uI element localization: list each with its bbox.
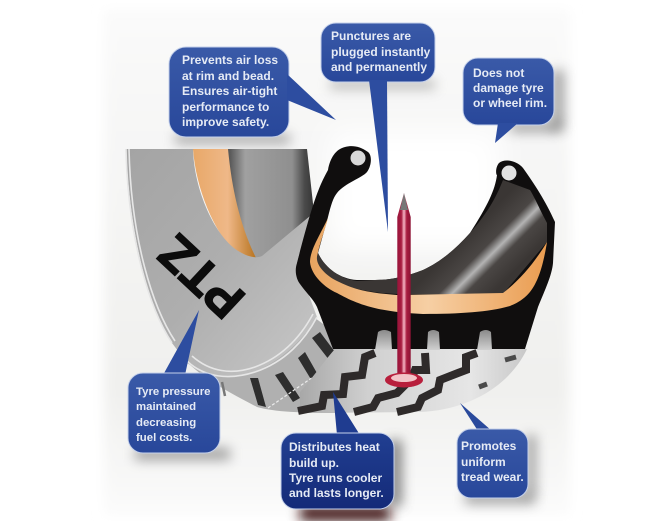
orange band bbox=[310, 218, 547, 314]
callout: prevents air loss: Ensures air-tight bbox=[182, 84, 277, 98]
callout: tyre pressure bbox=[128, 310, 220, 453]
callout: tyre pressure: Tyre pressure bbox=[136, 386, 211, 398]
callout: tyre pressure: fuel costs. bbox=[136, 432, 192, 444]
callout: does not damage: Does not bbox=[473, 66, 524, 80]
callout: tyre pressure: decreasing bbox=[136, 417, 196, 429]
callout: does not damage: or wheel rim. bbox=[473, 96, 547, 110]
tread surface bbox=[298, 349, 527, 413]
sidewall bbox=[126, 149, 317, 377]
right tyre cross-section bbox=[296, 146, 555, 413]
callout: punctures plugged: plugged instantly bbox=[331, 45, 431, 59]
callout: distributes heat: and lasts longer. bbox=[289, 486, 384, 500]
left tyre cross-section bbox=[126, 149, 345, 413]
callout: punctures plugged: Punctures are bbox=[331, 29, 411, 43]
callout: prevents air loss: improve safety. bbox=[182, 115, 269, 129]
callout: uniform tread wear: uniform bbox=[461, 455, 506, 469]
callout: punctures plugged: and permanently bbox=[331, 60, 427, 74]
callout: distributes heat: Tyre runs cooler bbox=[289, 471, 382, 485]
callout: uniform tread wear: Promotes bbox=[461, 439, 517, 453]
callout: uniform tread wear: tread wear. bbox=[461, 470, 524, 484]
rim bead left bbox=[350, 150, 366, 166]
callout: punctures plugged bbox=[321, 23, 435, 232]
callout: prevents air loss bbox=[169, 47, 336, 137]
orange tube layer bbox=[193, 149, 256, 258]
tread pillars bbox=[375, 330, 492, 350]
tyre inner cavity bbox=[193, 149, 317, 300]
callout: does not damage: damage tyre bbox=[473, 81, 544, 95]
tread grooves bbox=[298, 353, 477, 412]
rim bead right bbox=[502, 166, 516, 180]
PTZ logo: PTZ bbox=[148, 224, 255, 329]
callout: prevents air loss: Prevents air loss bbox=[182, 53, 278, 67]
callout: does not damage bbox=[463, 58, 554, 143]
black casing bbox=[296, 146, 555, 349]
tyre tread blocks left bbox=[185, 318, 345, 413]
callout: distributes heat bbox=[281, 392, 394, 509]
callout: distributes heat: Distributes heat bbox=[289, 440, 380, 454]
inner liner bbox=[316, 180, 547, 294]
nail bbox=[385, 193, 423, 388]
callout: prevents air loss: performance to bbox=[182, 100, 269, 114]
callout: distributes heat: build up. bbox=[289, 456, 339, 470]
callout: uniform tread wear bbox=[457, 403, 528, 498]
callout: tyre pressure: maintained bbox=[136, 401, 196, 413]
callout: prevents air loss: at rim and bead. bbox=[182, 69, 274, 83]
sidewall rim lines bbox=[126, 149, 317, 377]
